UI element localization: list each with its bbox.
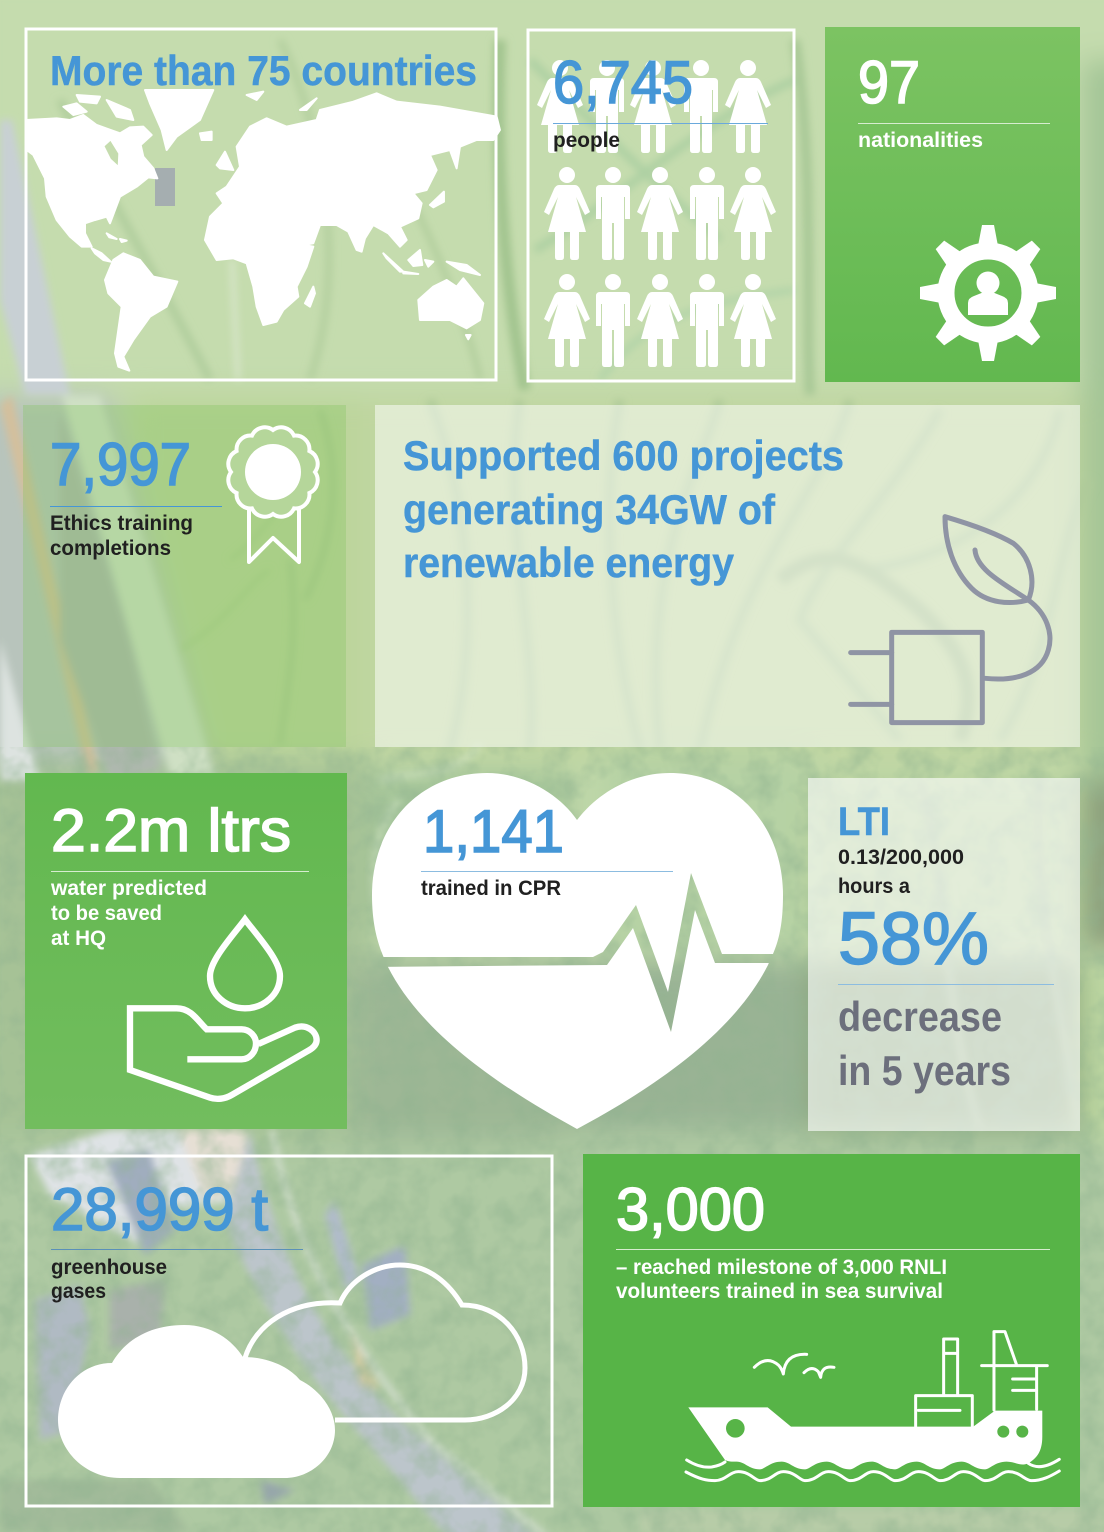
stat: nationalities: nationalities	[858, 129, 983, 152]
panel: renewable energy	[375, 405, 1080, 747]
stat: CPR	[421, 798, 673, 900]
icons: people rows	[537, 60, 776, 367]
text: LTI stats: in 5 years	[838, 1047, 1011, 1094]
stat: ethics	[50, 431, 222, 560]
icon: ship	[686, 1332, 1059, 1481]
world map	[27, 90, 500, 371]
panel: LTI	[808, 778, 1080, 1131]
stat: ethics: 7,997	[50, 431, 191, 498]
heading: countries: More than 75 countries	[50, 47, 477, 94]
stat: people: 6,745	[553, 49, 693, 116]
text: LTI stats: LTI	[838, 800, 890, 844]
icon: heart with pulse	[372, 773, 783, 1129]
stat: CPR: trained in CPR	[421, 877, 561, 900]
text: LTI stats	[838, 800, 1054, 1094]
stat: greenhouse gases: gases	[51, 1280, 106, 1303]
panel: water saved	[25, 773, 347, 1129]
panel: CPR heart	[372, 773, 783, 1129]
text: LTI stats: 0.13/200,000	[838, 846, 964, 869]
stat: sea survival: 3,000	[616, 1176, 765, 1243]
stat: ethics: completions	[50, 537, 171, 560]
panel: countries map	[26, 29, 500, 380]
icon: leaf and plug	[851, 517, 1050, 723]
panel: nationalities	[825, 27, 1080, 382]
stat: sea survival: volunteers trained in sea survival	[616, 1280, 943, 1303]
stat: water: 2.2m ltrs	[51, 797, 291, 864]
icon: gear with person	[920, 225, 1056, 361]
stat: water: water predicted	[50, 877, 207, 900]
stat: greenhouse gases: greenhouse	[51, 1256, 167, 1279]
text: LTI stats: hours a	[838, 875, 910, 898]
stat: greenhouse gases	[51, 1176, 303, 1303]
stat: nationalities: 97	[858, 49, 920, 116]
heading: renewable energy: Supported 600 projects	[403, 432, 844, 479]
panel: greenhouse gases	[26, 1156, 552, 1506]
stat: CPR: 1,141	[423, 798, 564, 865]
panel: sea survival	[583, 1154, 1080, 1507]
stat: water: at HQ	[51, 927, 106, 950]
stat: sea survival	[616, 1176, 1050, 1303]
icon: hand with water drop	[130, 919, 317, 1099]
stat: nationalities	[858, 49, 1050, 152]
text: LTI stats: 58%	[838, 897, 989, 980]
stat: people: people	[553, 129, 620, 152]
stat: water: to be saved	[51, 902, 162, 925]
stat: people	[553, 49, 768, 152]
stat: water	[50, 797, 309, 950]
text: LTI stats: decrease	[838, 993, 1002, 1040]
heading: renewable energy: generating 34GW of	[403, 486, 776, 533]
stat: sea survival: – reached milestone of 3,000 RNLI	[616, 1256, 947, 1279]
icon: rosette	[228, 427, 318, 562]
stat: greenhouse gases: 28,999 t	[51, 1176, 268, 1243]
panel: ethics training	[23, 405, 346, 747]
panel: people	[528, 30, 794, 381]
heading: renewable energy: renewable energy	[403, 539, 735, 586]
icon: clouds	[58, 1265, 525, 1478]
stat: ethics: Ethics training	[50, 512, 193, 535]
heading: renewable energy	[403, 432, 844, 586]
